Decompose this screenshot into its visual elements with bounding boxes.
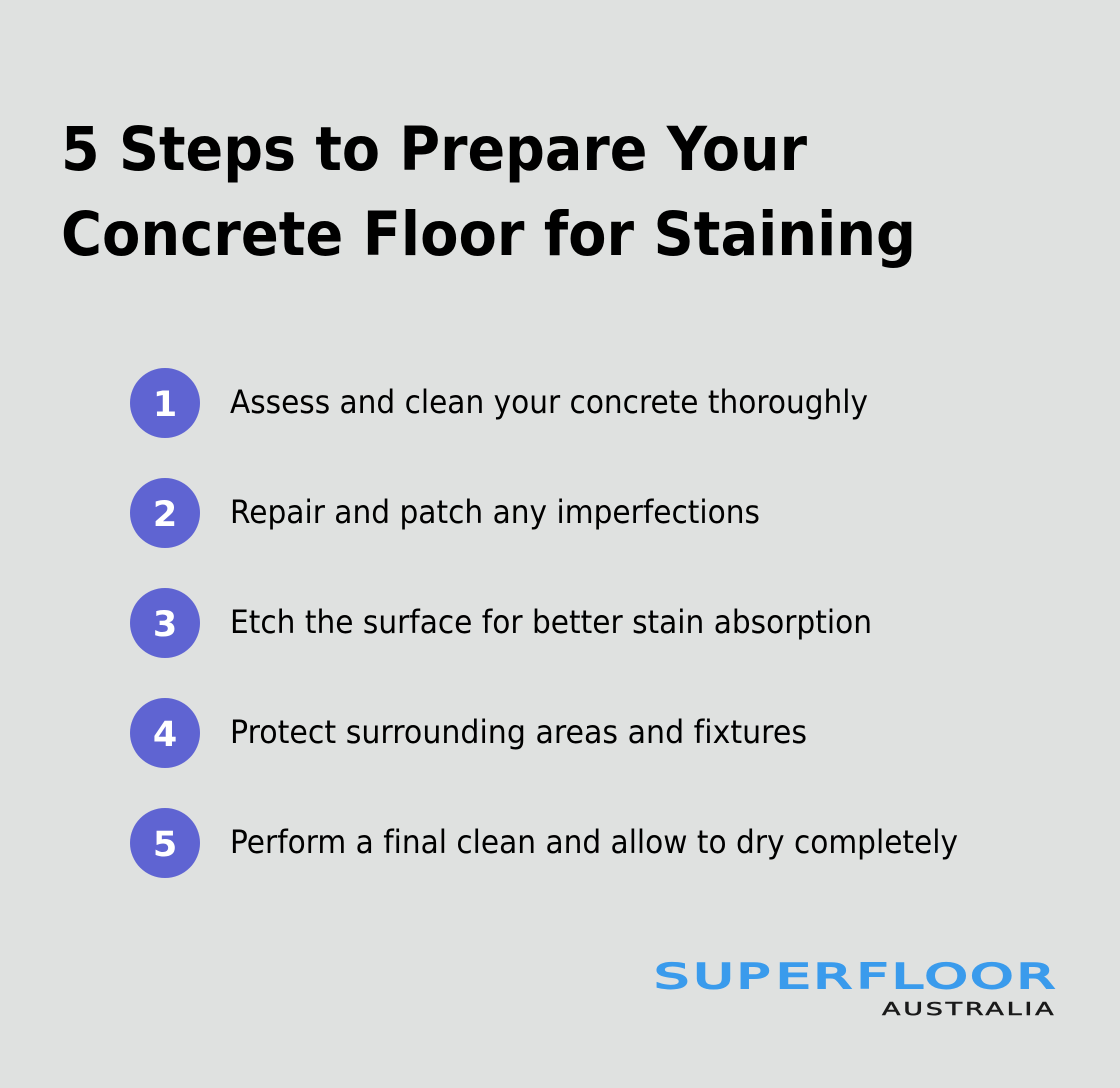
step 5	[130, 808, 958, 878]
step 2 text: Repair and patch any imperfections	[230, 493, 760, 531]
logo: Superfloor Australia	[654, 957, 1056, 1020]
title	[61, 114, 916, 270]
step 4 number badge	[130, 698, 200, 768]
step 4 text: Protect surrounding areas and fixtures	[230, 713, 807, 751]
step 1 text: Assess and clean your concrete thoroughly	[230, 383, 868, 421]
step 5 number badge	[130, 808, 200, 878]
title: 5 Steps to Prepare Your	[61, 114, 807, 185]
step 2 number badge	[130, 478, 200, 548]
step 1 number badge: 1	[153, 385, 177, 425]
title: Concrete Floor for Staining	[61, 199, 916, 270]
step 5 text: Perform a final clean and allow to dry completely	[230, 823, 958, 861]
logo: Superfloor Australia: SUPERFLOOR	[654, 957, 1055, 996]
step 3 number badge: 3	[153, 605, 177, 645]
step 1 number badge	[130, 368, 200, 438]
step 3 text: Etch the surface for better stain absorption	[230, 603, 872, 641]
step 4 number badge: 4	[153, 715, 177, 755]
step 3	[130, 588, 872, 658]
step 1	[130, 368, 868, 438]
step 2 number badge: 2	[153, 495, 177, 535]
logo: Superfloor Australia: AUSTRALIA	[882, 999, 1056, 1020]
step 4	[130, 698, 807, 768]
step 2	[130, 478, 760, 548]
step 5 number badge: 5	[153, 825, 177, 865]
step 3 number badge	[130, 588, 200, 658]
